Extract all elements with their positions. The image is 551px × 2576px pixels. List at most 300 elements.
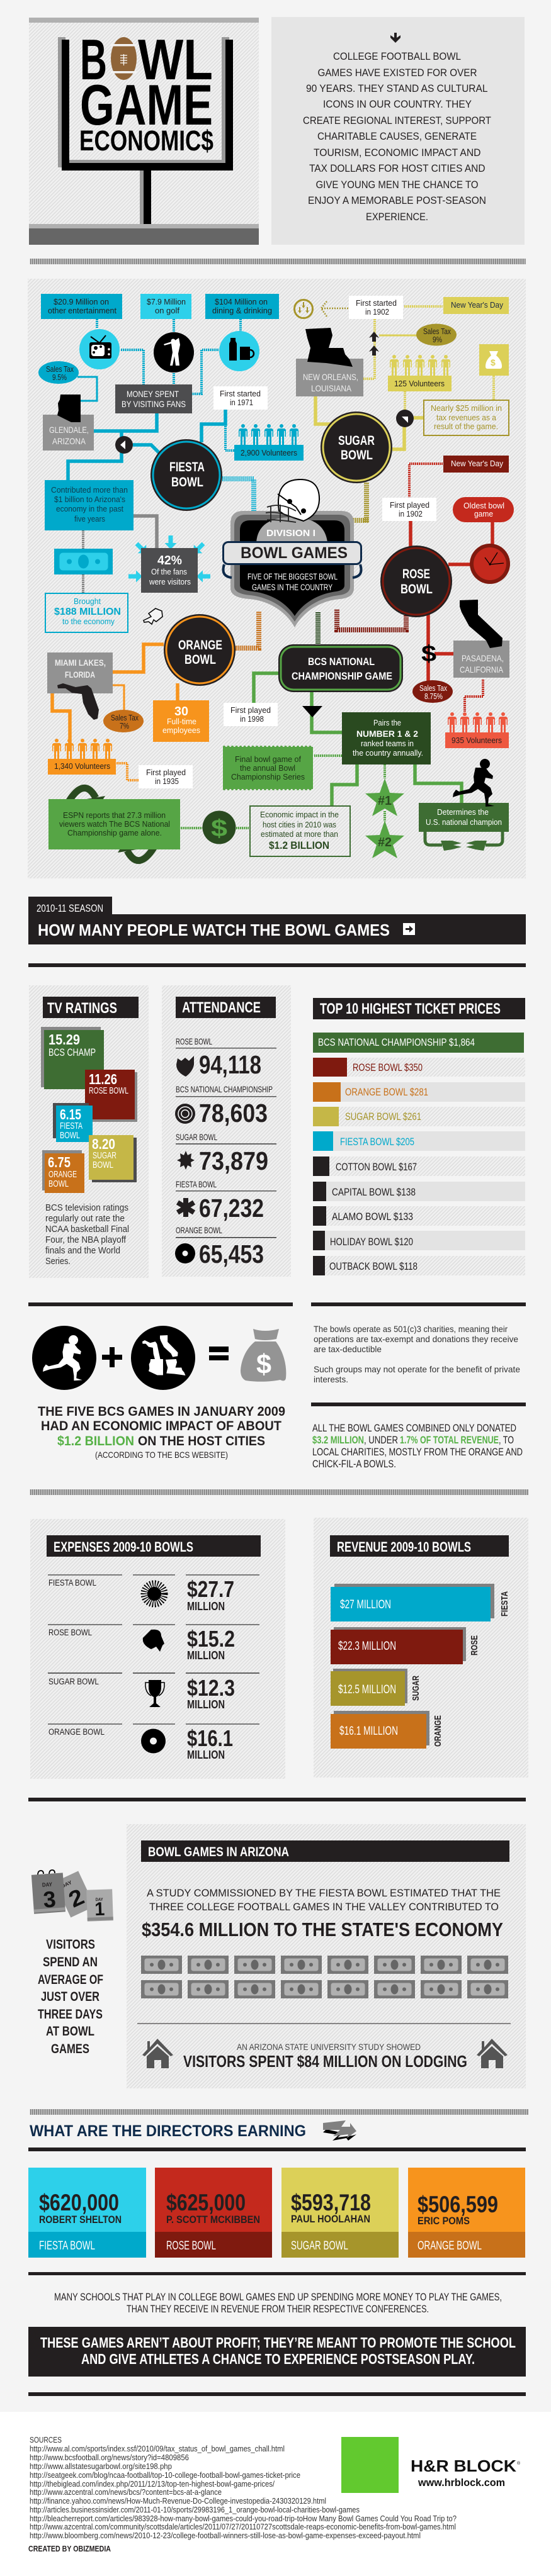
block: bcs champ 15.29: 15.29	[48, 1031, 80, 1048]
block: rose bowl 11.26: ROSE BOWL	[89, 1086, 128, 1096]
sources: SOURCES	[30, 2435, 62, 2444]
bar: sugar revenue: $12.5 MILLION	[338, 1683, 396, 1696]
text: donations	[312, 1422, 523, 1470]
study text: A STUDY COMMISSIONED BY THE FIESTA BOWL ESTIMATED THAT THE	[147, 1887, 501, 1899]
text: visitors spend three days: SPEND AN	[43, 1955, 98, 1969]
box: new year's day rose	[443, 456, 509, 473]
icon: down arrow	[390, 33, 400, 43]
row: rose expenses	[48, 1625, 259, 1662]
section header: how many people watch: 2010-11 SEASON	[37, 902, 103, 914]
tv ratings note	[45, 1202, 129, 1267]
block: fiesta bowl 6.15	[53, 1103, 93, 1142]
box: golf	[140, 294, 191, 319]
panel: bowl games map	[28, 279, 526, 878]
box: money spent by visiting fans: BY VISITING FANS	[122, 399, 186, 409]
star #2: #2	[378, 836, 392, 849]
box: pairs number 1 & 2: the country annually.	[353, 749, 423, 758]
bar: rose bowl: ROSE BOWL $350	[353, 1061, 423, 1073]
block: sugar bowl 8.20: 8.20	[92, 1136, 115, 1152]
bar: fiesta bowl	[313, 1131, 525, 1151]
logo: H&R Block	[341, 2437, 521, 2493]
bcs national championship badge	[278, 644, 403, 692]
sales tax 9.5%	[38, 361, 79, 384]
shield: division I bowl games	[223, 479, 361, 627]
box: first played 1902: in 1902	[399, 510, 423, 518]
box: pairs number 1 & 2: NUMBER 1 & 2	[356, 729, 418, 739]
box: 30 full-time employees: Full-time	[167, 717, 196, 726]
intro text: CREATE REGIONAL INTEREST, SUPPORT	[303, 115, 491, 126]
text: donations: $3.2 MILLION	[312, 1434, 364, 1446]
panel: introduction	[271, 17, 525, 245]
box: Miami Lakes, Florida	[47, 652, 113, 720]
title: ECONOMIC$	[79, 125, 213, 157]
bar: bcs national championship: BCS NATIONAL CHAMPIONSHIP $1,864	[318, 1036, 475, 1048]
sales tax 9%: 9%	[433, 335, 442, 344]
icon: runner in circle	[32, 1326, 96, 1390]
volunteers 935: 935 Volunteers	[452, 736, 502, 745]
row: fiesta bowl: 67,232	[199, 1194, 264, 1223]
orange bowl circle: ORANGE	[178, 638, 222, 652]
card: Robert Shelton: ROBERT SHELTON	[39, 2214, 122, 2226]
box: 30 full-time employees: 30	[174, 705, 188, 719]
tv ratings note: BCS television ratings	[45, 1202, 128, 1213]
stat: 42% visitors	[128, 535, 210, 593]
box: espn viewers with arrows: viewers watch The BCS National	[59, 820, 170, 829]
box: dining	[205, 294, 279, 319]
box: determines the champion: U.S. national champion	[426, 818, 502, 827]
row: fiesta bowl: FIESTA BOWL	[176, 1179, 217, 1189]
sources: http://www.azcentral.com/news/bcs/?content=bcs-at-a-glance	[30, 2487, 222, 2497]
box: determines the champion	[419, 803, 509, 851]
card: Eric Poms: $506,599	[418, 2192, 498, 2217]
study text	[142, 1887, 503, 1940]
icon: football helmet	[266, 479, 319, 522]
box: first started 1971	[213, 386, 268, 410]
icon: money bag square	[479, 344, 509, 376]
shield caption	[247, 572, 338, 592]
card: Paul Hoolahan: SUGAR BOWL	[291, 2239, 348, 2253]
volunteers 1,340: 1,340 Volunteers	[54, 762, 110, 771]
box: first played 1998	[224, 703, 278, 726]
intro text: CHARITABLE CAUSES, GENERATE	[317, 130, 477, 142]
banner: not about profit	[28, 2327, 526, 2377]
panel: top 10 ticket prices	[313, 998, 525, 1275]
sources: http://www.bloomberg.com/news/2010-12-23/college-football-winners-still-lose-as-bowl-game-expenses-exceed-payout.html	[30, 2531, 421, 2540]
footer background	[0, 2412, 551, 2576]
lodging text: VISITORS SPENT $84 MILLION ON LODGING	[183, 2052, 467, 2071]
pill: oldest bowl game: game	[474, 510, 493, 518]
shield caption: FIVE OF THE BIGGEST BOWL	[247, 572, 338, 581]
banner: bowl games	[223, 542, 361, 578]
orange bowl cluster	[47, 608, 259, 788]
sources: http://www.azcentral.com/community/scottsdale/articles/2011/07/27/20110727scottsdale-reaps-economic-benefits-from-bowl-games.html	[30, 2522, 456, 2531]
text: visitors spend three days: AVERAGE OF	[38, 1973, 103, 1987]
rose bowl circle: ROSE	[402, 567, 430, 581]
star #1	[365, 778, 404, 816]
shield caption: GAMES IN THE COUNTRY	[252, 583, 332, 592]
rose bowl circle	[380, 546, 452, 617]
row: sugar bowl: SUGAR BOWL	[176, 1132, 217, 1142]
bar: fiesta revenue: $27 MILLION	[340, 1598, 391, 1611]
box: first started 1971: in 1971	[230, 398, 253, 407]
row: orange expenses: MILLION	[187, 1749, 225, 1761]
tv ratings note: NCAA basketball Final	[45, 1224, 129, 1235]
volunteers 125	[388, 355, 452, 391]
box: contributed $1 billion: Contributed more than	[51, 485, 128, 495]
title panel: goal post	[29, 18, 259, 245]
text: charities note: Such groups may not operate for the benefit of private	[314, 1364, 520, 1374]
box: first started 1971: First started	[220, 389, 261, 398]
card: P. Scott McKibben: ROSE BOWL	[166, 2239, 216, 2253]
bar: rose revenue: $22.3 MILLION	[338, 1640, 396, 1653]
heading: ATTENDANCE	[182, 999, 261, 1016]
panel: tv ratings	[29, 985, 149, 1278]
card: Robert Shelton: FIESTA BOWL	[39, 2239, 95, 2253]
heading: BOWL GAMES IN ARIZONA	[148, 1845, 289, 1859]
bar: alamo bowl	[313, 1206, 525, 1226]
sources: http://thebiglead.com/index.php/2011/12/13/top-ten-highest-bowl-game-prices/	[30, 2479, 275, 2489]
intro text: 90 YEARS. THEY STAND AS CULTURAL	[306, 82, 487, 94]
heading: EXPENSES 2009-10 BOWLS	[54, 1539, 193, 1555]
bcs championship cluster	[48, 612, 509, 861]
bar: bcs national championship	[313, 1033, 524, 1053]
icon: money bag	[241, 1329, 286, 1382]
box: espn viewers with arrows: Championship game alone.	[67, 829, 162, 837]
volunteers 935	[445, 712, 509, 748]
row: rose expenses: MILLION	[187, 1649, 225, 1662]
icon: left arrow	[115, 436, 133, 454]
sources: http://www.bcsfootball.org/news/story?id=4809856	[30, 2453, 189, 2462]
text: visitors spend three days: GAMES	[51, 2042, 89, 2056]
sales tax 9.5%: 9.5%	[52, 373, 67, 382]
box: economic impact $1.2 billion: Economic impact in the	[260, 810, 339, 819]
box: first played 1998: First played	[230, 706, 271, 715]
bar: fiesta bowl: FIESTA BOWL $205	[340, 1136, 414, 1148]
fiesta bowl circle: BOWL	[171, 475, 203, 490]
title: WL	[138, 28, 213, 92]
icon: triangle arrow	[396, 410, 414, 427]
box: final bowl game: Championship Series	[231, 773, 305, 781]
heading	[176, 997, 276, 1018]
bar: rose revenue	[331, 1627, 480, 1664]
row: sugar expenses: $12.3	[187, 1675, 235, 1701]
volunteers 125: 125 Volunteers	[394, 379, 445, 388]
sources	[30, 2435, 457, 2540]
intro text: EXPERIENCE.	[366, 211, 428, 223]
bar: sugar revenue: SUGAR	[411, 1676, 421, 1701]
star #2	[365, 820, 404, 858]
lodging text	[183, 2042, 467, 2071]
row: bcs national championship	[175, 1084, 276, 1128]
block: rose bowl 11.26	[85, 1070, 137, 1122]
fiesta bowl cluster	[38, 294, 304, 632]
text: visitors spend three days: JUST OVER	[41, 1990, 99, 2004]
sources: http://www.al.com/sports/index.ssf/2010/09/tax_status_of_bowl_games_chall.html	[30, 2444, 285, 2453]
row: orange bowl: 65,453	[199, 1240, 264, 1268]
heading	[141, 1840, 509, 1862]
row: sugar bowl	[176, 1132, 276, 1175]
text: charities note	[314, 1324, 520, 1384]
sales tax 7%: Sales Tax	[111, 714, 139, 722]
panel: attendance	[162, 985, 291, 1277]
title	[79, 28, 213, 157]
bar: alamo bowl: ALAMO BOWL $133	[332, 1211, 413, 1223]
logo: H&R Block: www.hrblock.com	[418, 2477, 505, 2489]
icon: clock	[470, 544, 510, 584]
pill: oldest bowl game	[453, 497, 514, 522]
sources: http://bleacherreport.com/articles/983928-how-many-bowl-games-could-you-road-trip-toHow Many Bowl Games Could You Road Trip to?	[30, 2514, 457, 2523]
card: Robert Shelton	[28, 2168, 146, 2258]
block: sugar bowl 8.20: SUGAR	[93, 1151, 116, 1161]
stat: 42% visitors: were visitors	[149, 577, 191, 586]
sales tax 7%: 7%	[120, 722, 129, 731]
intro text: TOURISM, ECONOMIC IMPACT AND	[314, 147, 481, 159]
bar: orange revenue: ORANGE	[433, 1715, 443, 1747]
heading: what are the directors earning: WHAT ARE THE DIRECTORS EARNING	[30, 2122, 306, 2140]
sugar bowl circle: BOWL	[341, 448, 373, 462]
bar: orange revenue	[331, 1711, 443, 1749]
icon: house left	[142, 2039, 173, 2068]
icon: equals	[209, 1347, 229, 1360]
box: first played 1998: in 1998	[240, 715, 264, 724]
row: sugar bowl: 73,879	[199, 1146, 268, 1175]
intro text	[303, 50, 491, 223]
bar: orange bowl	[313, 1082, 525, 1102]
sugar bowl circle: SUGAR	[338, 434, 375, 448]
icon: zigzag arrow	[323, 2120, 356, 2141]
box: golf: on golf	[155, 306, 180, 315]
box: brought $188 million: $188 MILLION	[54, 607, 121, 617]
card: Paul Hoolahan: PAUL HOOLAHAN	[291, 2213, 370, 2225]
row: bcs national championship: 78,603	[199, 1099, 268, 1128]
icon: calendar pages: DAY	[60, 1879, 73, 1890]
sources: http://finance.yahoo.com/news/How-Much-Revenue-Do-College-investopedia-2430320129.html	[30, 2496, 326, 2506]
bar: orange revenue: $16.1 MILLION	[339, 1725, 398, 1738]
tv ratings note: Four, the NBA playoff	[45, 1235, 127, 1245]
volunteers 1,340	[48, 739, 116, 775]
box: new year's day rose: New Year's Day	[451, 459, 504, 468]
bar: rose revenue: ROSE	[469, 1635, 480, 1655]
bar: fiesta revenue: FIESTA	[499, 1591, 510, 1616]
box: dining: dining & drinking	[212, 306, 272, 315]
icon: calendar pages: 3	[42, 1886, 57, 1913]
box: brought $188 million	[45, 593, 128, 632]
box: pairs number 1 & 2: ranked teams in	[361, 739, 414, 748]
box: contributed $1 billion: $1 billion to Arizona's	[54, 495, 125, 504]
sources: http://seatgeek.com/blog/ncaa-football/top-10-college-football-bowl-games-ticket-price	[30, 2470, 300, 2480]
box: other entertainment	[41, 294, 122, 319]
bar: outback bowl	[313, 1256, 525, 1275]
box: money spent by visiting fans	[115, 384, 192, 413]
block: orange bowl 6.75: ORANGE	[48, 1170, 77, 1180]
box: Glendale, Arizona: GLENDALE,	[49, 425, 89, 435]
box: new year's day sugar: New Year's Day	[451, 301, 504, 310]
block: orange bowl 6.75: BOWL	[48, 1179, 69, 1189]
card: P. Scott McKibben: P. SCOTT MCKIBBEN	[166, 2214, 260, 2226]
bar: holiday bowl	[313, 1231, 525, 1250]
tv ratings note: Series.	[45, 1256, 71, 1267]
panel: expenses	[30, 1519, 285, 1779]
bar: orange bowl: ORANGE BOWL $281	[345, 1086, 428, 1098]
icon: dollar bill	[54, 549, 113, 574]
study text: THREE COLLEGE FOOTBALL GAMES IN THE VALLEY CONTRIBUTED TO	[149, 1901, 499, 1913]
box: 30 full-time employees	[153, 700, 209, 742]
block: rose bowl 11.26: 11.26	[89, 1071, 117, 1087]
tv ratings note: regularly out rate the	[45, 1213, 125, 1224]
headline: five bcs games: $1.2 BILLION	[57, 1434, 134, 1448]
orange bowl circle	[164, 614, 236, 686]
row: fiesta expenses	[48, 1575, 259, 1613]
row: sugar expenses: SUGAR BOWL	[48, 1677, 99, 1686]
heading: REVENUE 2009-10 BOWLS	[337, 1539, 471, 1555]
box: first started 1902: in 1902	[365, 308, 389, 316]
row: rose bowl	[176, 1036, 276, 1079]
box: brought $188 million: Brought	[74, 597, 101, 606]
box: final bowl game: Final bowl game of	[235, 755, 302, 764]
division label: DIVISION I	[266, 528, 315, 539]
card: Paul Hoolahan	[281, 2168, 399, 2258]
economic impact equation	[32, 1326, 286, 1460]
box: New Orleans, Louisiana	[296, 328, 363, 396]
box: tax revenues: tax revenues as a	[436, 413, 496, 422]
icon: plus	[102, 1347, 122, 1367]
box: final bowl game	[223, 747, 313, 789]
box: tax revenues: Nearly $25 million in	[431, 404, 502, 413]
block: fiesta bowl 6.15: FIESTA	[60, 1121, 82, 1131]
text: donations: CHICK-FIL-A BOWLS.	[312, 1458, 396, 1470]
box: 30 full-time employees: employees	[162, 726, 200, 735]
icon: three arrows in ring	[295, 300, 312, 318]
row: orange expenses	[48, 1724, 259, 1761]
icon: dollar coin	[203, 810, 236, 844]
lodging text: AN ARIZONA STATE UNIVERSITY STUDY SHOWED	[237, 2042, 421, 2052]
sources: http://www.allstatesugarbowl.org/site198.php	[30, 2461, 172, 2471]
credit: CREATED BY OBIZMEDIA	[28, 2544, 111, 2553]
box: new year's day sugar	[443, 297, 509, 314]
icon: calendar pages: DAY	[42, 1881, 52, 1888]
sales tax 8.75%: 8.75%	[424, 692, 443, 701]
icon: down triangle	[302, 706, 322, 717]
icon: television	[79, 329, 120, 369]
box: Pasadena, California	[453, 600, 509, 678]
icon: calendar pages: 2	[64, 1883, 88, 1913]
intro text: COLLEGE FOOTBALL BOWL	[333, 50, 461, 62]
box: economic impact $1.2 billion	[250, 806, 350, 856]
box: dining: $104 Million on	[215, 298, 268, 306]
block: fiesta bowl 6.15: 6.15	[60, 1106, 81, 1123]
sources: http://articles.businessinsider.com/2011-01-10/sports/29983196_1_orange-bowl-local-charities-bowl-games	[30, 2505, 360, 2514]
row: orange bowl: ORANGE BOWL	[176, 1225, 222, 1235]
bar: fiesta revenue	[331, 1584, 510, 1621]
title: GAME	[80, 74, 213, 137]
box: New Orleans, Louisiana: LOUISIANA	[311, 383, 352, 393]
icon: calendar pages	[31, 1870, 113, 1922]
text: visitors spend three days: AT BOWL	[46, 2024, 94, 2039]
headline: five bcs games: HAD AN ECONOMIC IMPACT OF ABOUT	[41, 1419, 281, 1433]
box: Glendale, Arizona	[43, 395, 94, 451]
panel: revenue	[314, 1518, 528, 1778]
tv ratings note: finals and the World	[45, 1245, 120, 1256]
bar: cotton bowl	[313, 1156, 525, 1176]
intro text: ENJOY A MEMORABLE POST-SEASON	[308, 194, 486, 206]
sales tax 8.75%	[412, 680, 453, 703]
block: fiesta bowl 6.15: BOWL	[60, 1131, 80, 1141]
card: P. Scott McKibben	[155, 2168, 272, 2258]
card: Eric Poms: ORANGE BOWL	[418, 2239, 482, 2253]
text: schools spending	[54, 2291, 502, 2315]
box: Miami Lakes, Florida: MIAMI LAKES,	[55, 658, 106, 668]
intro text: ICONS IN OUR COUNTRY. THEY	[323, 98, 472, 110]
text: donations: 1.7% OF TOTAL REVENUE	[400, 1434, 499, 1446]
card: Eric Poms	[408, 2168, 525, 2258]
box: Glendale, Arizona: ARIZONA	[52, 436, 86, 446]
bar: capital bowl: CAPITAL BOWL $138	[332, 1186, 416, 1198]
row: rose expenses: ROSE BOWL	[48, 1628, 92, 1637]
section header: how many people watch	[28, 897, 526, 944]
icon: running player	[453, 759, 494, 807]
sales tax 7%	[103, 710, 144, 732]
logo: H&R Block: H&R BLOCK	[411, 2456, 516, 2475]
row: bcs national championship: BCS NATIONAL CHAMPIONSHIP	[176, 1084, 273, 1094]
bar: rose bowl	[313, 1058, 525, 1077]
box: first played 1902: First played	[390, 501, 429, 510]
text: visitors spend three days: VISITORS	[46, 1937, 95, 1952]
bar: sugar revenue	[331, 1669, 421, 1706]
text: charities note: operations are tax-exempt and donations they receive	[314, 1334, 518, 1344]
box: final bowl game: the annual Bowl	[240, 764, 295, 773]
fiesta bowl circle	[151, 439, 222, 511]
orange bowl circle: BOWL	[185, 652, 216, 667]
card: Eric Poms: ERIC POMS	[418, 2215, 470, 2227]
volunteers 2,900	[234, 424, 304, 461]
card: P. Scott McKibben: $625,000	[166, 2190, 246, 2215]
box: money spent by visiting fans: MONEY SPENT	[127, 389, 179, 399]
row: fiesta bowl	[176, 1179, 276, 1223]
box: golf: $7.9 Million	[147, 298, 186, 306]
row: rose expenses: $15.2	[187, 1626, 235, 1652]
icon: football	[111, 37, 137, 80]
box: economic impact $1.2 billion: host cities in 2010 was	[263, 820, 336, 829]
card: Paul Hoolahan: $593,718	[291, 2190, 371, 2215]
icon: money bag: $	[256, 1349, 271, 1380]
box: pairs number 1 & 2: Pairs the	[373, 719, 401, 727]
block: sugar bowl 8.20: BOWL	[93, 1160, 113, 1170]
title: B	[80, 28, 107, 92]
text: visitors spend three days: THREE DAYS	[38, 2007, 103, 2022]
box: first played 1935: in 1935	[155, 777, 179, 786]
bar: capital bowl	[313, 1182, 525, 1201]
dollar bill rows	[141, 1956, 508, 1998]
row: orange bowl	[175, 1225, 276, 1268]
icon: four states in circle	[131, 1326, 195, 1390]
block: sugar bowl 8.20	[89, 1135, 137, 1182]
icon: dollar coin: $	[211, 815, 227, 842]
box: other entertainment: other entertainment	[48, 306, 117, 315]
box: contributed $1 billion: five years	[74, 514, 105, 524]
icon: bottle and mug	[219, 331, 259, 371]
headline: five bcs games: (ACCORDING TO THE BCS WEBSITE)	[95, 1450, 228, 1460]
headline: five bcs games: THE FIVE BCS GAMES IN JANUARY 2009	[38, 1404, 285, 1419]
study text: $354.6 MILLION TO THE STATE'S ECONOMY	[142, 1918, 503, 1940]
icon: house right	[477, 2039, 508, 2068]
box: economic impact $1.2 billion: $1.2 BILLION	[269, 839, 329, 851]
row: rose bowl: 94,118	[199, 1050, 261, 1079]
dotted arrow	[321, 301, 348, 316]
row: sugar expenses	[48, 1673, 259, 1711]
bar: holiday bowl: HOLIDAY BOWL $120	[330, 1236, 413, 1248]
box: first played 1902	[382, 498, 436, 521]
headline: five bcs games: ON THE HOST CITIES	[138, 1434, 265, 1448]
